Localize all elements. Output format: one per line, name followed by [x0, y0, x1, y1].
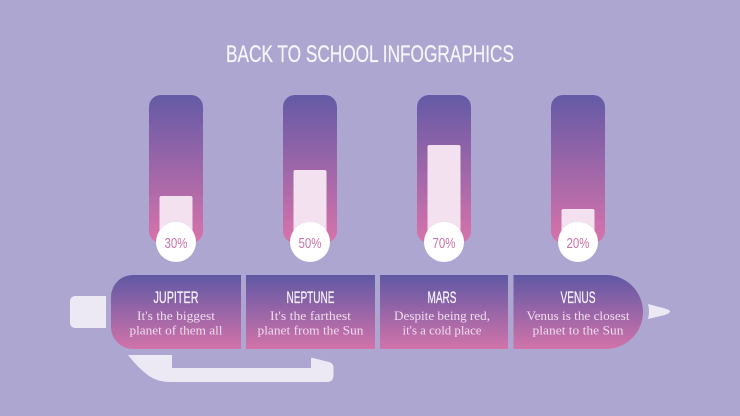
- bar gauge: Venus 20%: 20%: [566, 236, 590, 252]
- panel: Jupiter: planet of them all: [130, 322, 223, 338]
- panel: Neptune: NEPTUNE: [286, 288, 334, 307]
- panel: Jupiter: JUPITER: [154, 288, 198, 307]
- bar gauge: Mars 70%: [417, 95, 471, 262]
- bar gauge: Neptune 50%: 50%: [298, 236, 322, 252]
- bar gauge: Jupiter 30%: 30%: [164, 236, 188, 252]
- icon: pen cap end: [70, 296, 106, 328]
- panel: Mars: it's a cold place: [402, 322, 482, 338]
- panel: Neptune: [246, 275, 375, 349]
- panel: Neptune: It's the farthest: [270, 308, 351, 323]
- panel: Mars: [380, 275, 508, 349]
- panel: Mars: MARS: [428, 288, 456, 307]
- title: BACK TO SCHOOL INFOGRAPHICS: [226, 41, 514, 68]
- panel: Venus: planet to the Sun: [532, 322, 624, 338]
- panel: Jupiter: [111, 275, 241, 349]
- bar gauge: Venus 20%: [551, 95, 605, 262]
- panel: Venus: Venus is the closest: [526, 308, 630, 323]
- icon: pen clip: [128, 355, 334, 382]
- icon: pen tip: [648, 304, 670, 319]
- panel: Venus: [514, 275, 643, 349]
- bar gauge: Jupiter 30%: [149, 95, 203, 262]
- panel: Jupiter: It's the biggest: [137, 308, 215, 323]
- panel: Mars: Despite being red,: [394, 308, 490, 323]
- bar gauge: Neptune 50%: [283, 95, 337, 262]
- panel: Neptune: planet from the Sun: [258, 322, 364, 338]
- panel: Venus: VENUS: [560, 288, 596, 307]
- bar gauge: Mars 70%: 70%: [432, 236, 456, 252]
